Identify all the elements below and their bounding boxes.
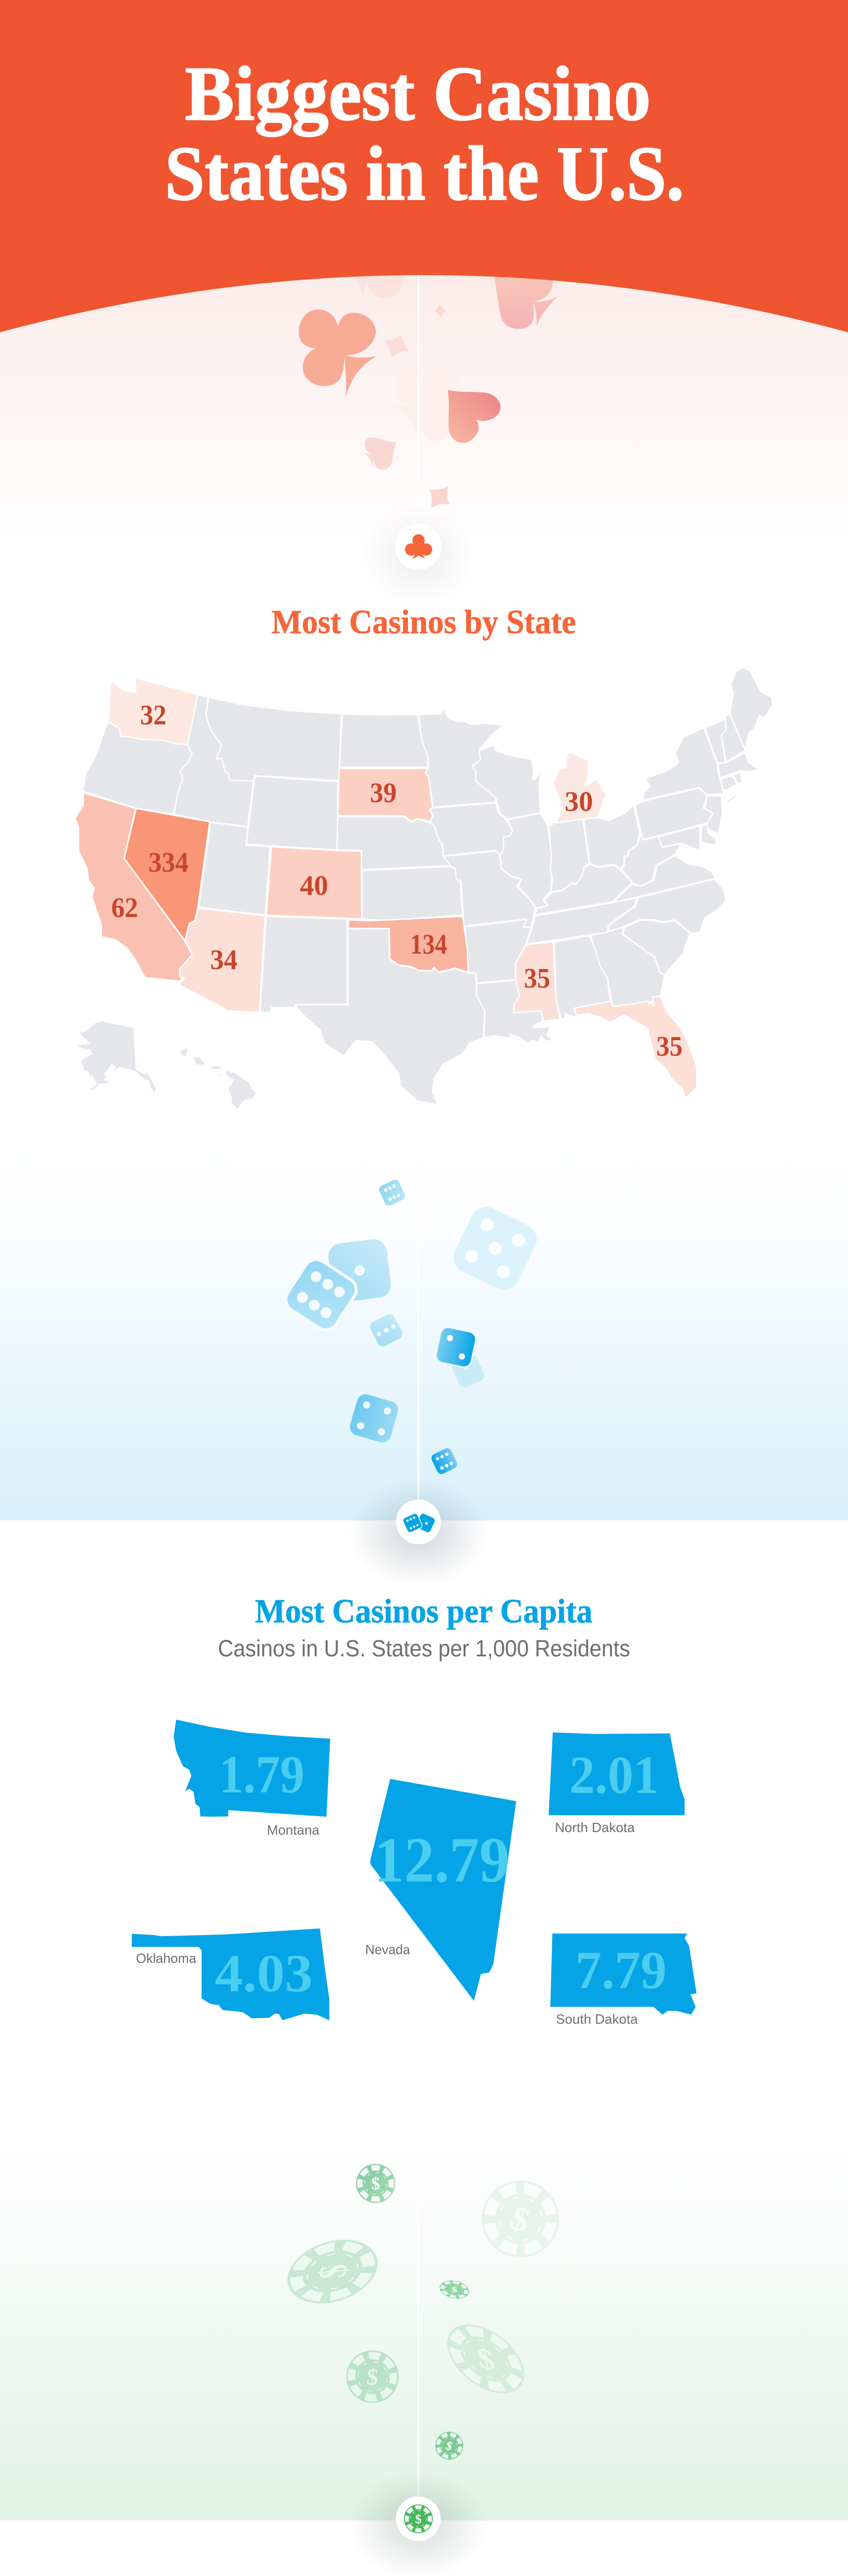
icon: chip top: $ bbox=[371, 2174, 380, 2193]
panel: falling dice divider bbox=[0, 1133, 848, 1587]
heading: most casinos by state: Most Casinos by State bbox=[272, 603, 576, 641]
state card: South Dakota bbox=[550, 1934, 697, 2027]
icon: chip small flat: $ bbox=[450, 2284, 459, 2295]
state: Mississippi 35 bbox=[514, 942, 560, 1021]
state: Nevada 334 bbox=[124, 808, 210, 941]
heading: Most Casinos per Capita bbox=[255, 1592, 592, 1630]
icon: chip tilted left bbox=[279, 2229, 386, 2314]
icon: large one die bbox=[327, 1238, 393, 1303]
state: Oklahoma 134 bbox=[348, 917, 468, 972]
map: casinos by state bbox=[75, 668, 773, 1109]
title: States in the U.S. bbox=[165, 131, 684, 216]
state: Michigan 30 bbox=[553, 753, 606, 823]
state card: North Dakota: North Dakota bbox=[555, 1820, 635, 1835]
state: South Dakota 39: 39 bbox=[370, 777, 397, 808]
state: Florida 35 bbox=[574, 996, 697, 1098]
panel: most casinos per capita bbox=[132, 1592, 697, 2027]
icon: large pale five die bbox=[448, 1201, 542, 1295]
icon: club badge bbox=[395, 523, 442, 570]
state card: Montana bbox=[174, 1720, 330, 1838]
icon: chip bottom bbox=[431, 2428, 467, 2464]
state: California 62: 62 bbox=[111, 892, 138, 923]
subheading: Casinos in U.S. States per 1,000 Residents bbox=[218, 1635, 630, 1662]
icon: chip top bbox=[356, 2164, 395, 2203]
icon: chip badge bbox=[396, 2497, 441, 2541]
state: California 62 bbox=[75, 793, 192, 981]
state card: Oklahoma bbox=[132, 1928, 329, 2020]
icon: chip tilted right bbox=[434, 2311, 537, 2408]
icon: pale die behind bbox=[450, 1353, 486, 1389]
state: Arizona 34: 34 bbox=[210, 944, 238, 975]
state card: Nevada: 12.79 bbox=[374, 1825, 510, 1896]
icon: dice badge bbox=[396, 1499, 441, 1545]
state: Colorado 40 bbox=[266, 847, 362, 919]
state card: Montana: Montana bbox=[267, 1822, 320, 1838]
state card: Nevada bbox=[365, 1779, 516, 2001]
title bbox=[165, 51, 684, 216]
inset: Alaska and Hawaii bbox=[78, 1021, 256, 1109]
header band with curved edge bbox=[0, 0, 848, 332]
state: Mississippi 35: 35 bbox=[524, 962, 550, 994]
illustration: card suits bbox=[299, 272, 557, 508]
icon: small six die bbox=[378, 1178, 406, 1207]
state: Nevada 334: 334 bbox=[148, 846, 189, 878]
icon: large six die bbox=[281, 1255, 361, 1334]
state card: Oklahoma: 4.03 bbox=[215, 1944, 313, 2003]
icon: chip middle: $ bbox=[366, 2363, 379, 2390]
state: Colorado 40: 40 bbox=[300, 870, 328, 901]
panel: falling chips divider bbox=[0, 2138, 848, 2576]
icon: chip bottom: $ bbox=[444, 2439, 454, 2453]
state card: Nevada: Nevada bbox=[365, 1942, 411, 1957]
title: Biggest Casino bbox=[185, 51, 651, 137]
icon: small three die bbox=[368, 1312, 404, 1348]
state: Arizona 34 bbox=[179, 908, 265, 1012]
panel: header with falling card suits bbox=[0, 0, 848, 607]
state: South Dakota 39 bbox=[338, 769, 433, 821]
base map: other states bbox=[83, 668, 773, 1105]
icon: strong two die bbox=[434, 1326, 478, 1369]
state card: North Dakota bbox=[549, 1733, 685, 1835]
state: Florida 35: 35 bbox=[656, 1030, 683, 1062]
icon: chip tilted right: $ bbox=[474, 2341, 498, 2378]
state: Washington 32 bbox=[109, 677, 198, 744]
icon: chip large pale: $ bbox=[505, 2199, 535, 2240]
icon: chip badge: $ bbox=[415, 2512, 421, 2526]
state: Washington 32: 32 bbox=[140, 699, 166, 731]
icon: four die bbox=[348, 1392, 400, 1445]
state card: South Dakota: 7.79 bbox=[575, 1941, 667, 2000]
state card: Oklahoma: Oklahoma bbox=[136, 1951, 197, 1966]
icon: chip tilted left: $ bbox=[310, 2263, 356, 2280]
state: Oklahoma 134: 134 bbox=[410, 928, 447, 960]
state card: South Dakota: South Dakota bbox=[556, 2011, 638, 2027]
icon: chip middle bbox=[344, 2348, 401, 2405]
state card: North Dakota: 2.01 bbox=[569, 1745, 659, 1805]
icon: small strong six die bbox=[430, 1447, 459, 1476]
state card: Montana: 1.79 bbox=[219, 1745, 304, 1804]
icon: chip large pale bbox=[470, 2168, 571, 2269]
state: Michigan 30: 30 bbox=[565, 786, 593, 817]
icon: chip small flat bbox=[438, 2278, 471, 2301]
